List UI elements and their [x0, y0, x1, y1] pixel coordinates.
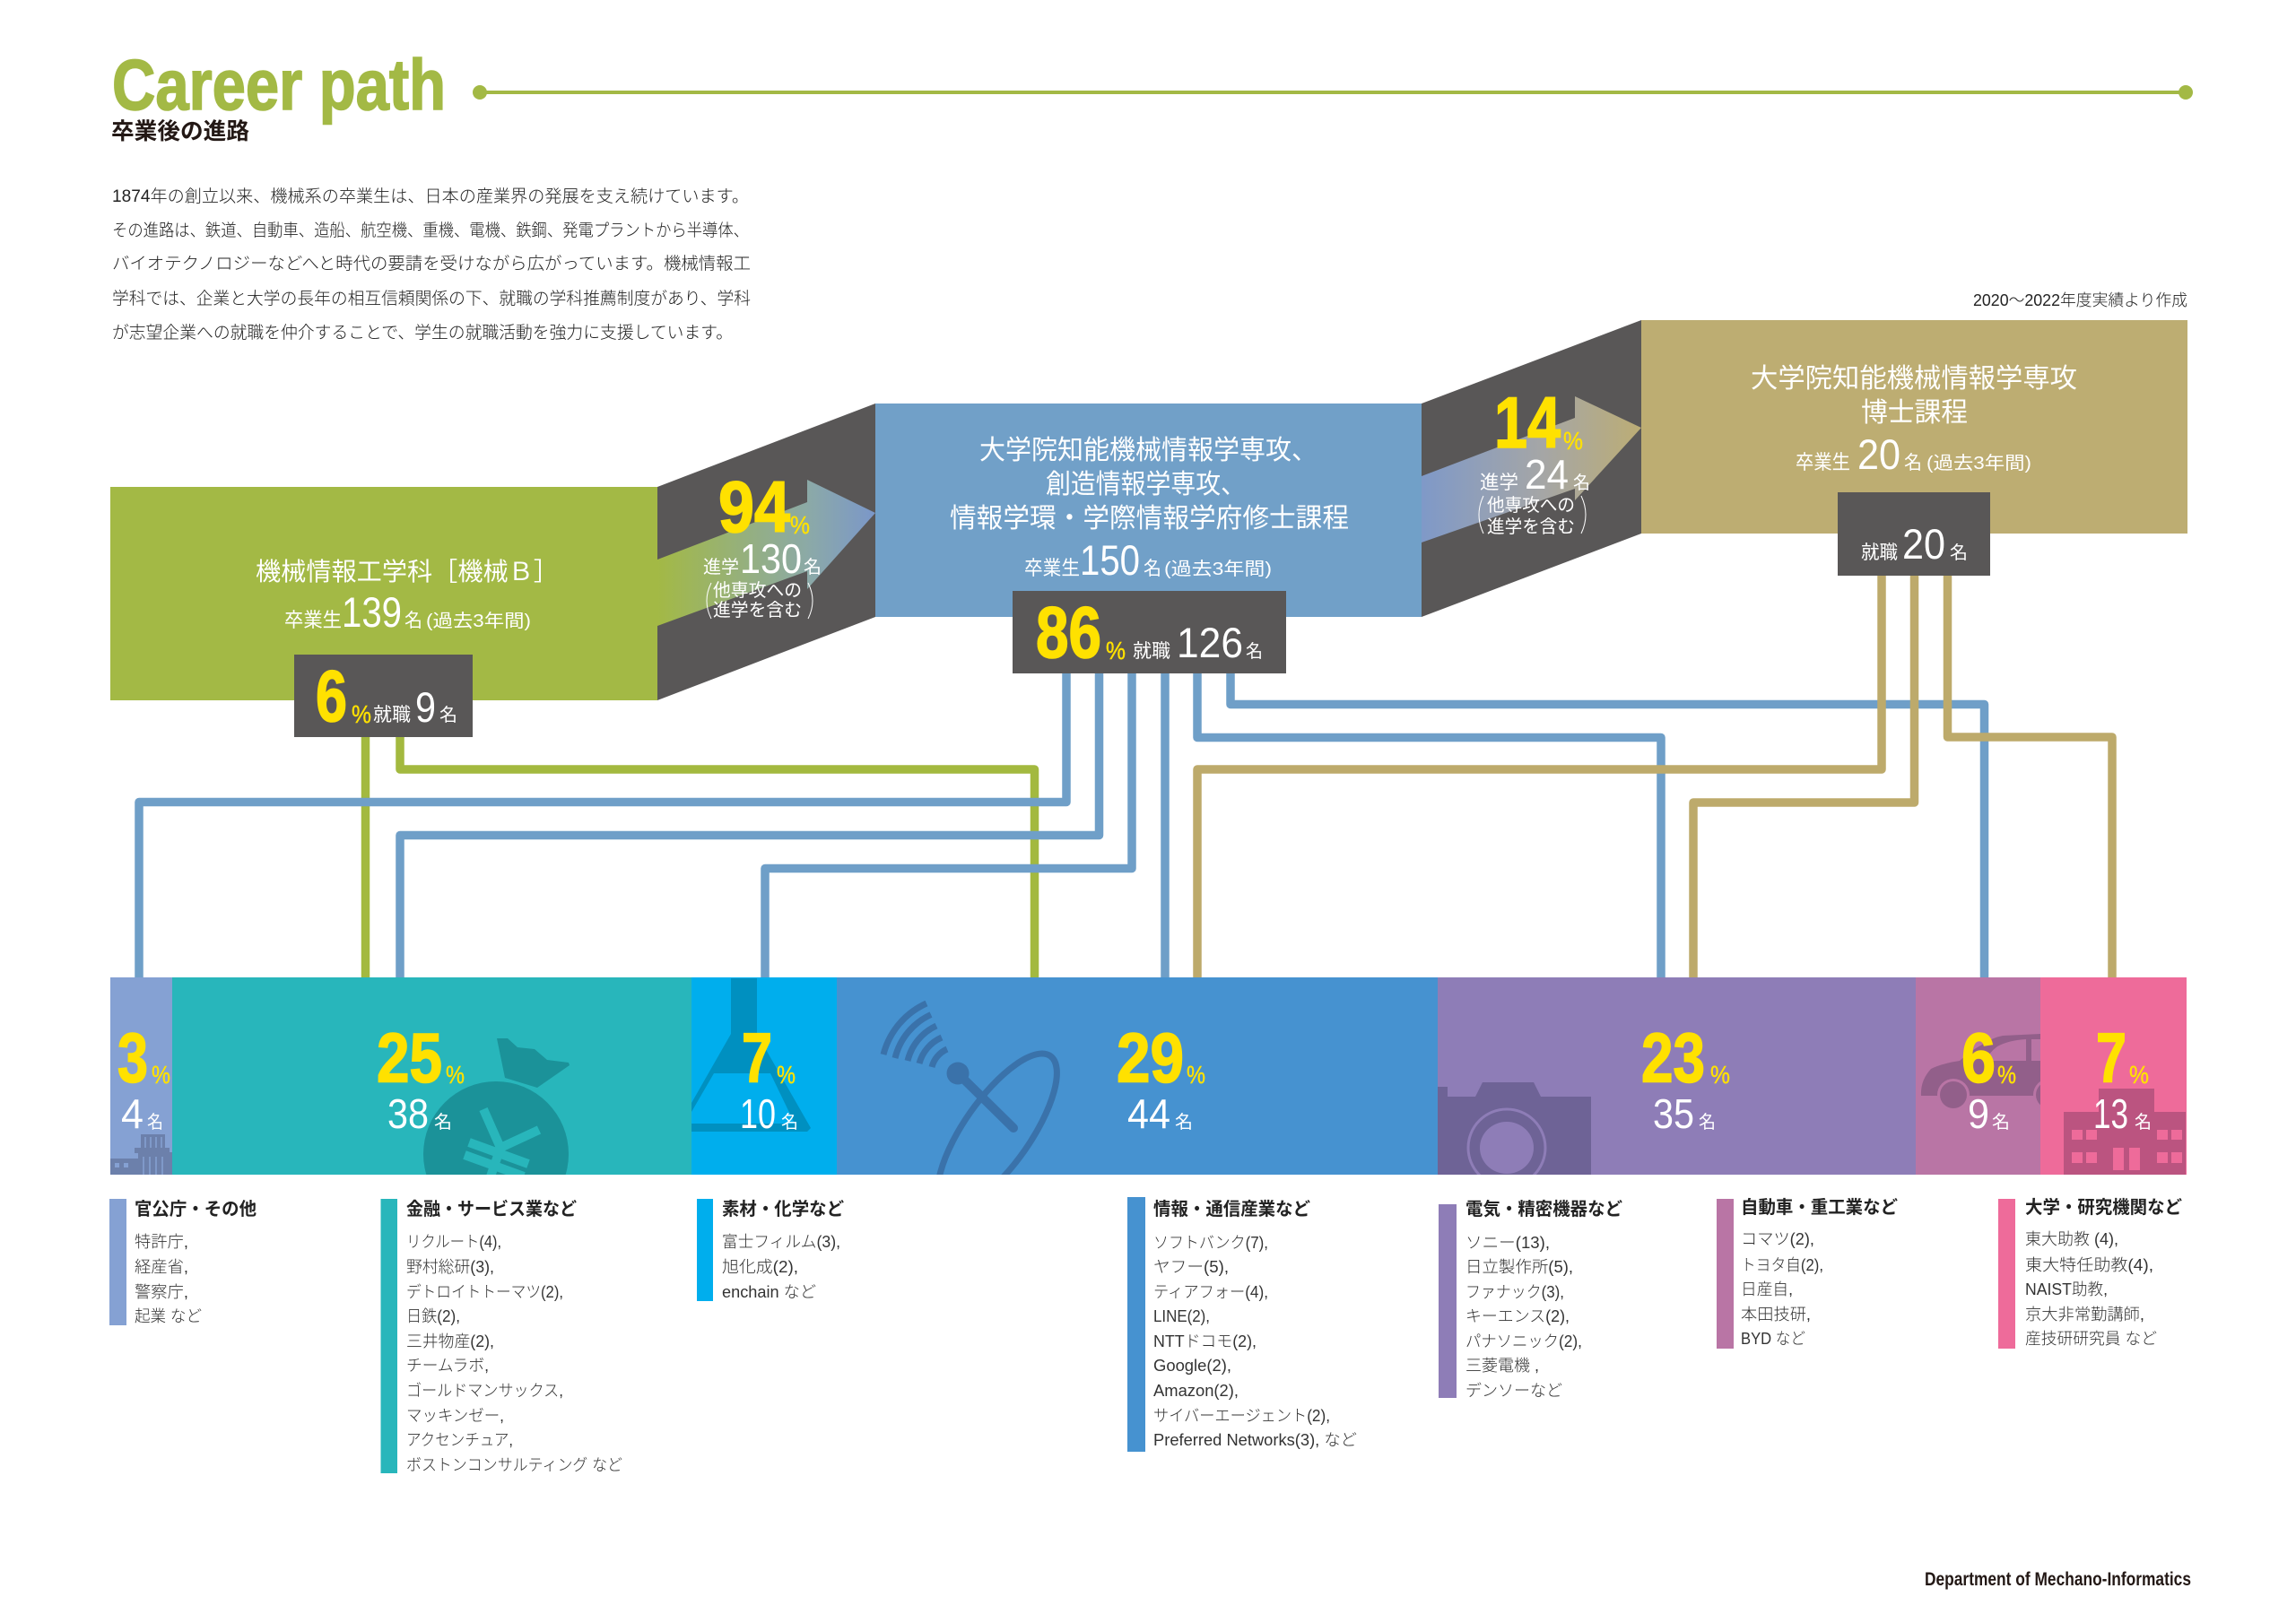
- legend: IT and telecom: ソフトバンク(7),: [1153, 1234, 1268, 1252]
- legend: automotive: [1717, 1197, 1898, 1349]
- legend: finance: [380, 1199, 622, 1474]
- legend: universities: 大学・研究機関など: [2025, 1197, 2182, 1218]
- bar segment: universities: %: [2129, 1061, 2149, 1089]
- intro paragraph: が志望企業への就職を仲介することで、学生の就職活動を強力に支援しています。: [112, 323, 733, 343]
- bar segment: government: %: [152, 1061, 170, 1089]
- bar segment: government: 3: [117, 1019, 148, 1098]
- legend: government: 経産省,: [135, 1258, 188, 1276]
- bar segment: materials: [691, 977, 837, 1175]
- bar segment: IT and telecom: [837, 977, 1438, 1175]
- bar segment: finance: [172, 977, 691, 1175]
- panel: undergraduate employment: [294, 655, 473, 737]
- legend: universities: [1998, 1197, 2182, 1349]
- legend: universities: 東大特任助教(4),: [2025, 1256, 2153, 1274]
- bar segment: finance: 25: [377, 1019, 442, 1098]
- arrow panel: master to doctor: %: [1563, 427, 1583, 455]
- bar segment: universities: 名: [2135, 1112, 2152, 1133]
- intro paragraph: 1874年の創立以来、機械系の卒業生は、日本の産業界の発展を支え続けています。: [112, 187, 749, 206]
- subtitle: 卒業後の進路: [111, 119, 249, 144]
- arrow panel: master to doctor: 24: [1525, 451, 1569, 498]
- legend: finance: 三井物産(2),: [406, 1332, 494, 1350]
- legend: universities: NAIST助教,: [2025, 1280, 2108, 1298]
- panel: undergraduate: (過去3年間): [426, 611, 531, 631]
- panel: doctor: 大学院知能機械情報学専攻: [1751, 364, 2077, 394]
- legend: IT and telecom: Preferred Networks(3), など: [1153, 1431, 1357, 1449]
- legend: finance: ゴールドマンサックス,: [406, 1382, 563, 1400]
- legend: finance: リクルート(4),: [406, 1233, 501, 1251]
- legend: finance: マッキンゼー,: [406, 1407, 504, 1425]
- legend: electronics: キーエンス(2),: [1465, 1307, 1570, 1325]
- panel: master employment: %: [1106, 637, 1126, 664]
- arrow panel: master to doctor: [1422, 320, 1641, 617]
- panel: undergraduate: 139: [342, 588, 402, 636]
- legend: IT and telecom: Amazon(2),: [1153, 1382, 1239, 1400]
- arrow panel: undergraduate to master: 130: [740, 535, 802, 582]
- legend: finance: 金融・サービス業など: [406, 1199, 577, 1219]
- intro paragraph: 学科では、企業と大学の長年の相互信頼関係の下、就職の学科推薦制度があり、学科: [112, 289, 751, 308]
- bar segment: materials: 10: [740, 1090, 776, 1137]
- legend: automotive: コマツ(2),: [1741, 1230, 1814, 1248]
- bar segment: finance: %: [446, 1061, 465, 1089]
- intro paragraph: その進路は、鉄道、自動車、造船、航空機、重機、電機、鉄鋼、発電プラントから半導体、: [112, 221, 749, 240]
- panel: doctor: 名: [1904, 453, 1922, 473]
- legend: government: 警察庁,: [135, 1283, 188, 1301]
- legend: IT and telecom: サイバーエージェント(2),: [1153, 1407, 1330, 1425]
- bar segment: electronics: [1438, 977, 1916, 1186]
- legend: government: 起業 など: [135, 1307, 202, 1325]
- panel: master employment: 126: [1177, 619, 1243, 666]
- legend: materials: [697, 1199, 844, 1301]
- panel: master employment: 86: [1036, 593, 1101, 673]
- panel: master employment: 就職: [1133, 641, 1170, 662]
- bar segment: automotive: 名: [1992, 1112, 2010, 1133]
- intro paragraph: [112, 187, 751, 343]
- legend: IT and telecom: ヤフー(5),: [1153, 1258, 1229, 1276]
- bar segment: government: 名: [147, 1112, 163, 1133]
- panel: master employment: 名: [1246, 641, 1263, 662]
- legend: electronics: 日立製作所(5),: [1465, 1258, 1573, 1276]
- legend: IT and telecom: Google(2),: [1153, 1357, 1231, 1375]
- panel: undergraduate employment: %: [352, 700, 371, 728]
- legend: finance: アクセンチュア,: [406, 1431, 513, 1449]
- bar segment: government: 4: [121, 1090, 144, 1137]
- panel: master: 名: [1144, 559, 1161, 579]
- bar segment: electronics: 23: [1641, 1019, 1705, 1098]
- bar segment: automotive: [1916, 977, 2040, 1175]
- panel: doctor employment: [1838, 492, 1990, 576]
- legend: IT and telecom: 情報・通信産業など: [1153, 1199, 1310, 1219]
- legend: universities: 東大助教 (4),: [2025, 1230, 2118, 1248]
- bar segment: IT and telecom: 名: [1175, 1112, 1193, 1133]
- panel: master: 卒業生: [1024, 557, 1080, 579]
- legend: electronics: パナソニック(2),: [1465, 1332, 1582, 1350]
- bar segment: finance: 38: [387, 1090, 429, 1137]
- panel: master: (過去3年間): [1164, 559, 1272, 579]
- arrow panel: undergraduate to master: 名: [804, 557, 822, 577]
- panel: doctor: 卒業生: [1796, 451, 1850, 473]
- legend: universities: 産技研研究員 など: [2025, 1330, 2157, 1348]
- panel: undergraduate: [110, 487, 657, 700]
- bar segment: materials: 名: [781, 1112, 798, 1133]
- legend: IT and telecom: NTTドコモ(2),: [1153, 1332, 1257, 1350]
- legend: government: 特許庁,: [135, 1233, 188, 1251]
- arrow panel: undergraduate to master: [657, 404, 875, 700]
- panel: master: [875, 404, 1422, 617]
- title: Career path: [112, 45, 446, 125]
- legend: finance: デトロイトトーマツ(2),: [406, 1283, 563, 1301]
- panel: undergraduate employment: 就職: [373, 705, 411, 725]
- legend: government: [109, 1199, 257, 1325]
- legend: materials: 富士フィルム(3),: [722, 1233, 840, 1251]
- panel: undergraduate employment: 6: [316, 656, 347, 737]
- bar segment: IT and telecom: 29: [1117, 1019, 1184, 1098]
- arrow panel: undergraduate to master: %: [790, 511, 810, 539]
- bar segment: universities: [2040, 977, 2187, 1175]
- panel: doctor employment: 就職: [1861, 542, 1898, 563]
- arrow panel: undergraduate to master: 94: [718, 467, 790, 548]
- legend: government: 官公庁・その他: [135, 1199, 257, 1219]
- bar segment: IT and telecom: %: [1187, 1061, 1205, 1089]
- legend: materials: 素材・化学など: [722, 1199, 844, 1219]
- panel: undergraduate: 名: [404, 611, 422, 631]
- arrow panel: master to doctor: 他専攻への: [1487, 495, 1575, 516]
- panel: doctor: [1641, 320, 2187, 534]
- intro paragraph: バイオテクノロジーなどへと時代の要請を受けながら広がっています。機械情報工: [112, 254, 751, 273]
- arrow panel: undergraduate to master: 進学を含む: [713, 600, 802, 621]
- panel: doctor: (過去3年間): [1926, 453, 2031, 473]
- panel: undergraduate employment: 9: [415, 683, 436, 731]
- panel: master: 150: [1080, 536, 1140, 584]
- panel: doctor employment: 名: [1950, 542, 1968, 563]
- panel: doctor employment: 20: [1902, 520, 1945, 568]
- panel: undergraduate: 機械情報工学科［機械Ｂ］: [256, 558, 559, 586]
- legend: IT and telecom: LINE(2),: [1153, 1307, 1210, 1325]
- source note: 2020〜2022年度実績より作成: [1973, 291, 2187, 309]
- legend: automotive: 本田技研,: [1741, 1306, 1811, 1324]
- bar segment: electronics: %: [1710, 1061, 1730, 1089]
- arrow panel: master to doctor: 名: [1573, 473, 1590, 493]
- bar segment: universities: 7: [2096, 1019, 2126, 1098]
- legend: automotive: トヨタ自(2),: [1741, 1256, 1823, 1274]
- legend: electronics: 三菱電機 ,: [1465, 1357, 1539, 1375]
- legend: electronics: 電気・精密機器など: [1465, 1199, 1622, 1219]
- panel: master: 情報学環・学際情報学府修士課程: [950, 504, 1349, 534]
- legend: electronics: ソニー(13),: [1465, 1234, 1550, 1252]
- bar segment: government: [110, 977, 172, 1175]
- bar segment: materials: 7: [742, 1019, 772, 1098]
- panel: undergraduate: 卒業生: [284, 609, 342, 631]
- panel: master employment: [1013, 591, 1286, 673]
- footer: Department of Mechano-Informatics: [1925, 1569, 2191, 1590]
- legend: automotive: 自動車・重工業など: [1741, 1197, 1898, 1218]
- legend: IT and telecom: ティアフォー(4),: [1153, 1283, 1268, 1301]
- bar segment: IT and telecom: 44: [1127, 1090, 1170, 1137]
- arrow panel: master to doctor: 14: [1494, 383, 1561, 464]
- legend: finance: 野村総研(3),: [406, 1258, 494, 1276]
- arrow panel: undergraduate to master: 他専攻への: [713, 580, 802, 601]
- legend: finance: チームラボ,: [406, 1357, 489, 1375]
- legend: materials: enchain など: [722, 1283, 816, 1301]
- legend: IT and telecom: [1127, 1197, 1357, 1452]
- arrow panel: undergraduate to master: 進学: [703, 557, 739, 577]
- legend: finance: 日鉄(2),: [406, 1307, 460, 1325]
- bar segment: universities: 13: [2093, 1090, 2128, 1137]
- panel: undergraduate employment: 名: [439, 705, 457, 725]
- bar segment: materials: %: [777, 1061, 796, 1089]
- panel: master: 創造情報学専攻、: [1046, 470, 1246, 499]
- legend: electronics: [1439, 1199, 1622, 1400]
- panel: doctor: 博士課程: [1861, 398, 1968, 428]
- bar segment: finance: 名: [434, 1112, 452, 1133]
- arrow panel: master to doctor: 進学を含む: [1487, 516, 1575, 537]
- panel: doctor: 20: [1857, 430, 1900, 478]
- legend: automotive: BYD など: [1741, 1330, 1805, 1348]
- title rule with end dots: [473, 85, 2193, 100]
- bar segment: automotive: 6: [1961, 1019, 1996, 1098]
- legend: electronics: デンソーなど: [1465, 1382, 1562, 1400]
- legend: finance: ボストンコンサルティング など: [406, 1456, 622, 1474]
- legend: materials: 旭化成(2),: [722, 1258, 798, 1276]
- arrow panel: master to doctor: 進学: [1480, 473, 1518, 493]
- legend: electronics: ファナック(3),: [1465, 1283, 1564, 1301]
- legend: automotive: 日産自,: [1741, 1280, 1793, 1298]
- panel: master: 大学院知能機械情報学専攻、: [979, 436, 1318, 465]
- legend: universities: 京大非常勤講師,: [2025, 1306, 2144, 1324]
- bar segment: electronics: 名: [1699, 1112, 1716, 1133]
- bar segment: electronics: 35: [1653, 1090, 1694, 1137]
- bar segment: automotive: 9: [1968, 1090, 1989, 1137]
- bar segment: automotive: %: [1997, 1061, 2016, 1089]
- connector lines: [139, 574, 2112, 977]
